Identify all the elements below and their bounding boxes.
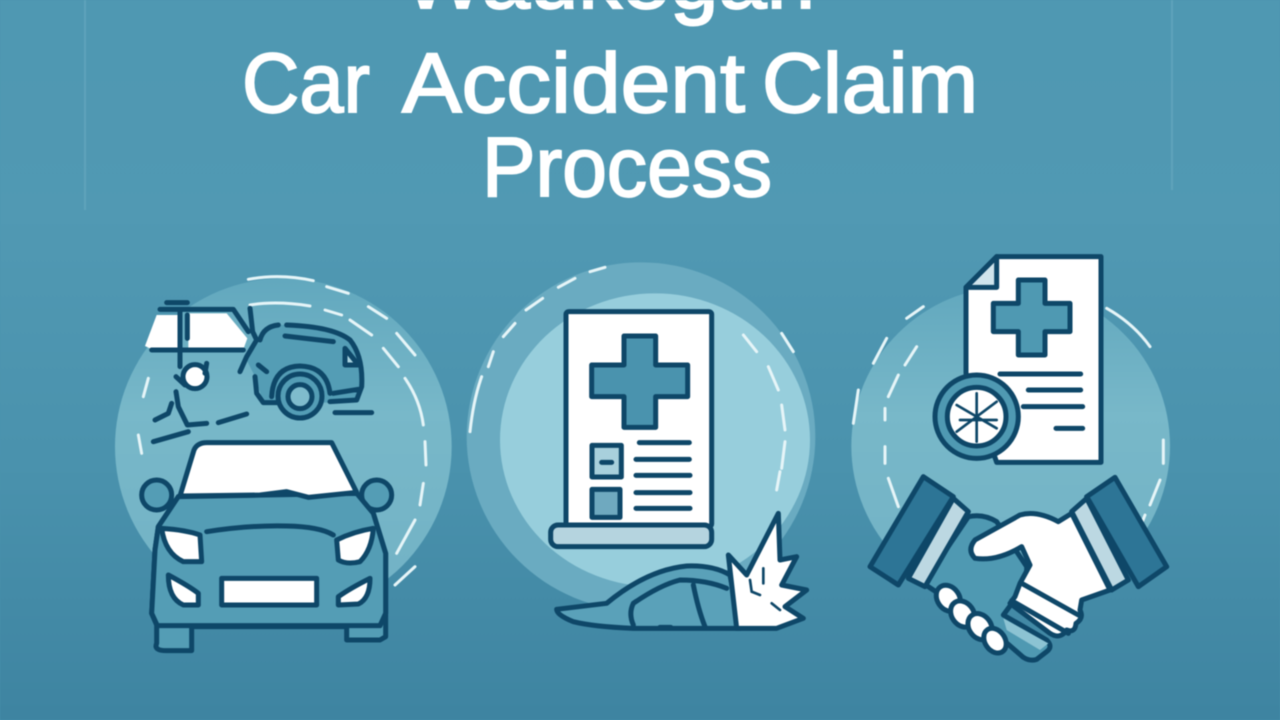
front car [142,443,392,651]
title [242,0,978,214]
document [551,312,712,547]
title: Accident [402,36,745,130]
document with wheel [935,257,1101,462]
crashed car with impact burst [557,513,807,628]
icon: medical record [467,262,815,628]
title: Process [482,120,772,214]
icon: settlement handshake [851,257,1170,660]
icon: car accident [115,277,452,651]
title: Claim [762,36,978,130]
handshake [870,477,1167,660]
upper crashed cars [145,303,372,442]
title: Car [242,36,370,130]
